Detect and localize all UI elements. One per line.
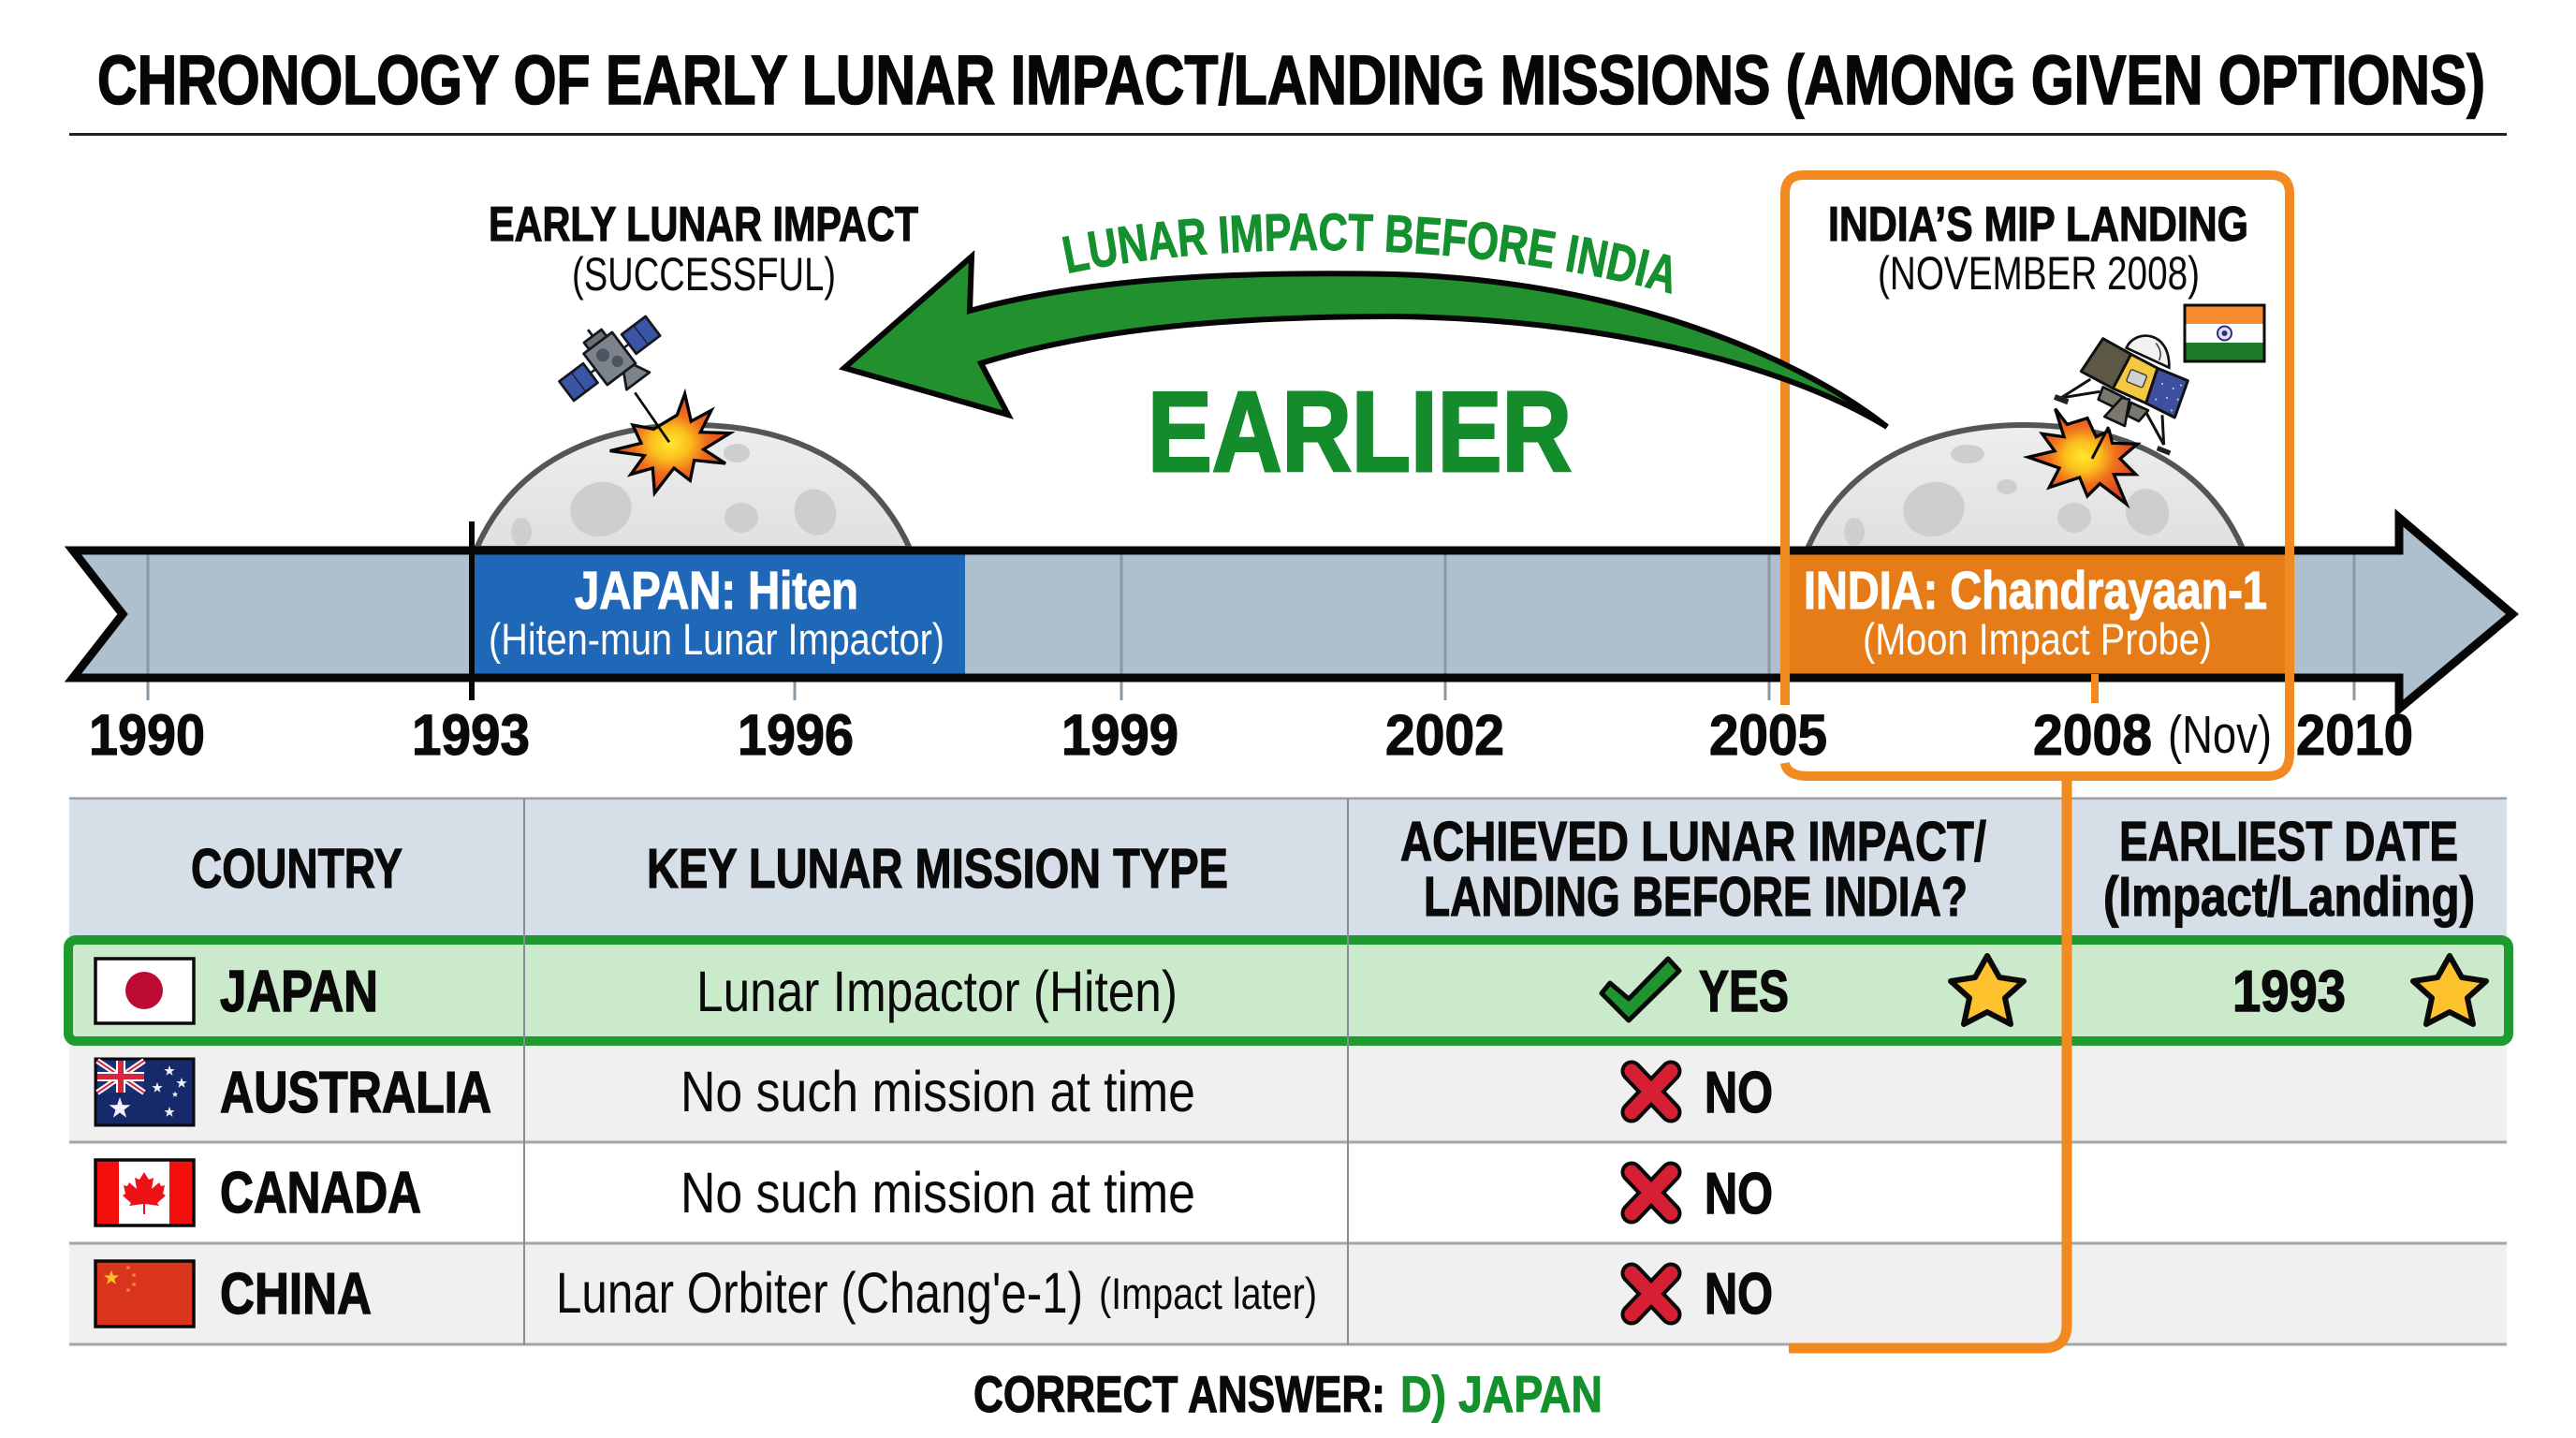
answer: no Australia: NO xyxy=(1705,1061,1773,1125)
icon: Moon Impact Probe lander and burst xyxy=(2028,336,2188,504)
early lunar impact caption xyxy=(489,198,918,301)
timeline year labels: 2010 xyxy=(2296,703,2413,767)
icon: red cross Canada xyxy=(1632,1172,1671,1213)
mission type column: Lunar Impactor (Hiten) xyxy=(696,960,1178,1023)
Japan segment label xyxy=(489,561,944,664)
table header labels: LANDING BEFORE INDIA? xyxy=(1424,866,1968,928)
country names xyxy=(220,960,491,1327)
timeline year labels: (Nov) xyxy=(2168,705,2272,765)
early lunar impact caption: (SUCCESSFUL) xyxy=(572,248,836,301)
table header labels: EARLIEST DATE xyxy=(2119,811,2458,873)
timeline arrow bar xyxy=(73,518,2512,709)
mission type column: No such mission at time xyxy=(681,1161,1195,1225)
flag: Japan xyxy=(95,959,194,1023)
icon: check mark xyxy=(1602,959,1679,1020)
mission type column: Lunar Orbiter (Chang'e-1) xyxy=(556,1261,1083,1325)
early lunar impact caption: EARLY LUNAR IMPACT xyxy=(489,198,918,252)
timeline year labels: 1993 xyxy=(412,703,530,767)
icon: red cross Australia xyxy=(1632,1071,1671,1112)
answer: yes: YES xyxy=(1699,960,1789,1024)
timeline year labels: 1996 xyxy=(738,703,854,767)
country names: CANADA xyxy=(220,1161,421,1225)
icon: star for date xyxy=(2413,956,2486,1024)
answer: no Canada: NO xyxy=(1705,1162,1773,1226)
India segment label: (Moon Impact Probe) xyxy=(1863,614,2212,664)
timeline year labels xyxy=(89,703,2413,767)
country names: JAPAN xyxy=(220,960,378,1024)
timeline year labels: 2005 xyxy=(1709,703,1827,767)
India Chandrayaan-1 segment xyxy=(1787,552,2291,676)
table header labels: (Impact/Landing) xyxy=(2103,866,2475,928)
India MIP landing caption: (NOVEMBER 2008) xyxy=(1878,247,2200,300)
table header labels: ACHIEVED LUNAR IMPACT/ xyxy=(1400,811,1986,873)
icon: India flag xyxy=(2185,305,2264,361)
timeline year labels: 2008 xyxy=(2033,703,2152,767)
mission type column: No such mission at time xyxy=(681,1060,1195,1123)
arrow: earlier, pointing back to Japan xyxy=(844,257,1887,427)
table header labels xyxy=(191,811,2475,928)
table header background xyxy=(69,799,2507,936)
table rows background xyxy=(69,798,2507,1346)
flag: China xyxy=(95,1261,194,1327)
correct answer line: D) JAPAN xyxy=(1400,1365,1603,1423)
India segment label: INDIA: Chandrayaan-1 xyxy=(1804,561,2267,621)
table header labels: KEY LUNAR MISSION TYPE xyxy=(647,838,1228,900)
correct answer line: CORRECT ANSWER: xyxy=(973,1365,1385,1423)
moon: India landing site xyxy=(1808,425,2243,549)
highlighted Japan row xyxy=(68,940,2509,1041)
icon: Hiten satellite and impact burst xyxy=(545,297,730,493)
India MIP landing caption xyxy=(1828,198,2248,300)
country names: CHINA xyxy=(220,1262,372,1327)
mission type column: (Impact later) xyxy=(1099,1269,1317,1318)
mission type column xyxy=(556,960,1317,1325)
Japan Hiten segment xyxy=(475,552,965,676)
label: EARLIER: EARLIER xyxy=(1148,368,1572,495)
timeline year labels: 1999 xyxy=(1061,703,1178,767)
table header labels: COUNTRY xyxy=(191,838,402,900)
flag: Canada xyxy=(95,1160,194,1225)
timeline year labels: 2002 xyxy=(1385,703,1504,767)
Japan segment label: (Hiten-mun Lunar Impactor) xyxy=(489,614,944,664)
icon: red cross China xyxy=(1632,1273,1671,1314)
orange highlight frame xyxy=(1785,175,2290,776)
timeline year labels: 1990 xyxy=(89,703,205,767)
icon: star for yes xyxy=(1951,956,2024,1024)
curved label: lunar impact before India: LUNAR IMPACT BEFORE INDIA xyxy=(1061,213,1672,294)
country names: AUSTRALIA xyxy=(220,1061,491,1125)
moon: Japan impact site xyxy=(476,425,910,549)
orange connector over table xyxy=(1789,774,2067,1348)
India segment label xyxy=(1804,561,2267,664)
answer: no China: NO xyxy=(1705,1262,1773,1327)
date: 1993: 1993 xyxy=(2232,960,2346,1024)
Japan segment label: JAPAN: Hiten xyxy=(575,561,858,621)
flag: Australia xyxy=(95,1059,194,1125)
India MIP landing caption: INDIA’S MIP LANDING xyxy=(1828,198,2248,252)
table xyxy=(68,798,2509,1346)
